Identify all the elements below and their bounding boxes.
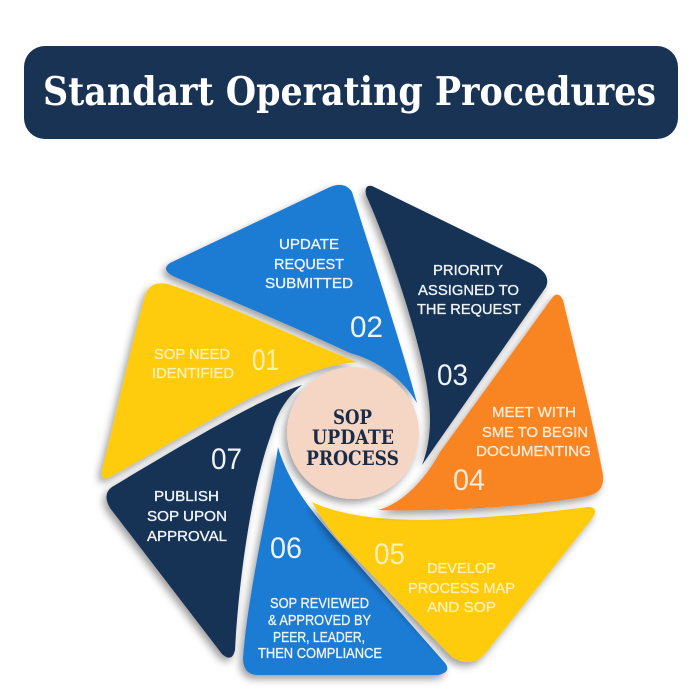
segment 04: meet	[378, 294, 603, 510]
segment 03: priority: THE REQUEST	[417, 301, 521, 318]
segment 01: need identified: IDENTIFIED	[152, 365, 234, 382]
segment 01: need identified: SOP NEED	[154, 346, 230, 363]
center circle: SOP update process: SOP	[333, 405, 372, 429]
segment 06: review: THEN COMPLIANCE	[258, 645, 382, 662]
segment 07: publish: 07	[211, 443, 242, 476]
segment 06: review: SOP REVIEWED	[270, 595, 369, 612]
segment 02: update request: SUBMITTED	[265, 275, 353, 292]
segment 07: publish: SOP UPON	[147, 508, 227, 525]
center circle: SOP update process: UPDATE	[312, 425, 394, 449]
segment 01: need identified	[102, 283, 357, 478]
segment 04: meet: DOCUMENTING	[476, 443, 591, 460]
segment 05: develop	[312, 502, 595, 662]
center circle: SOP update process	[287, 367, 419, 499]
segment 06: review: PEER, LEADER,	[273, 629, 365, 646]
segment 02: update request	[166, 185, 417, 403]
title	[24, 46, 678, 139]
segment 05: develop: DEVELOP	[427, 560, 496, 577]
segment 02: update request: UPDATE	[279, 236, 339, 253]
segment 01: need identified: 01	[252, 344, 279, 377]
segment 04: meet: SME TO BEGIN	[482, 424, 588, 441]
segment 05: develop: AND SOP	[427, 599, 496, 616]
segment 06: review	[243, 447, 447, 675]
center circle: SOP update process: PROCESS	[306, 446, 399, 470]
segment 03: priority	[366, 186, 547, 465]
segment 02: update request: 02	[350, 311, 383, 344]
segment 05: develop: PROCESS MAP	[408, 580, 515, 597]
segment 03: priority: ASSIGNED TO	[418, 282, 519, 299]
segment 07: publish: APPROVAL	[147, 528, 227, 545]
segment 03: priority: 03	[437, 359, 468, 392]
segment 06: review: 06	[270, 532, 302, 565]
segment 07: publish	[106, 385, 302, 658]
segment 04: meet: 04	[453, 464, 485, 497]
segment 02: update request: REQUEST	[274, 256, 344, 273]
segment 04: meet: MEET WITH	[492, 404, 576, 421]
segment 06: review: & APPROVED BY	[268, 612, 371, 629]
segment 05: develop: 05	[374, 538, 405, 571]
segment 07: publish: PUBLISH	[154, 488, 219, 505]
segment 03: priority: PRIORITY	[433, 262, 503, 279]
